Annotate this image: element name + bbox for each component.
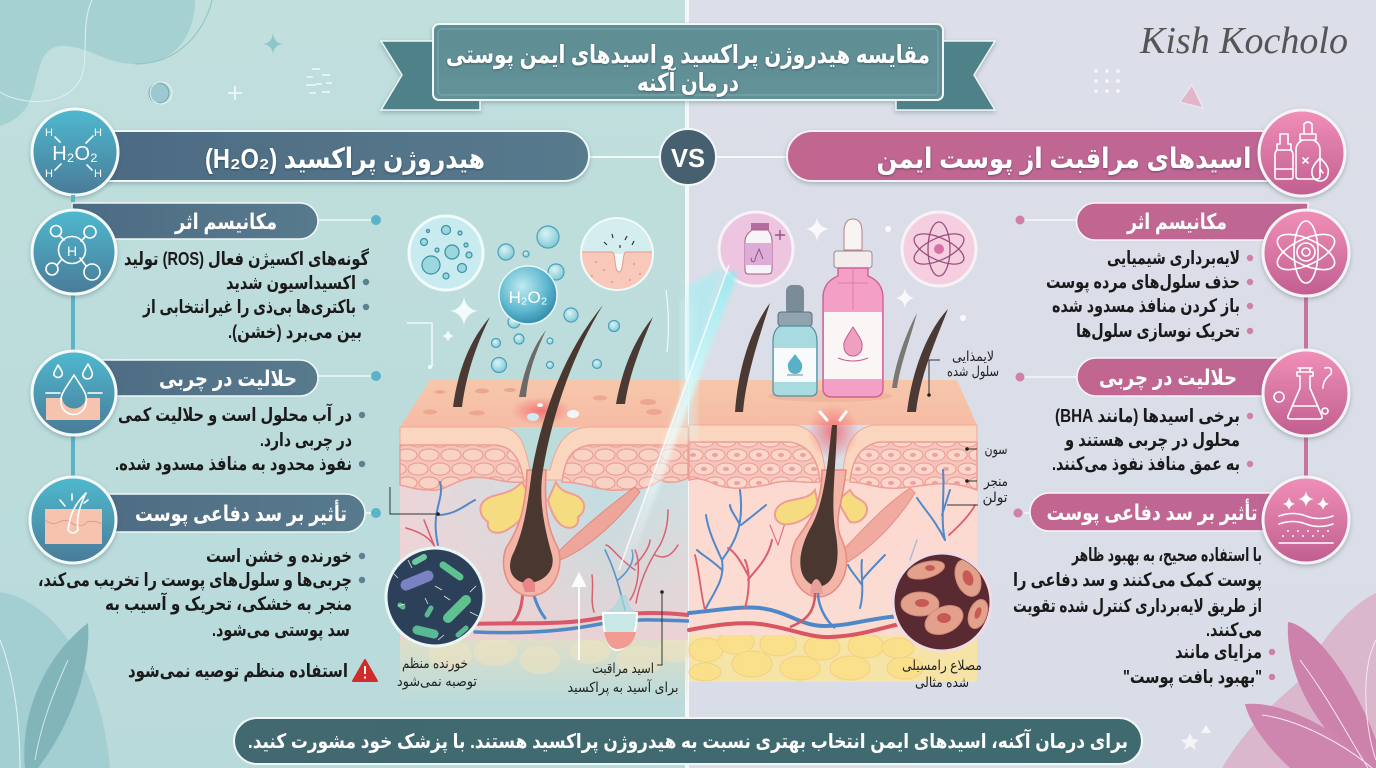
text: mechanism bullets: گونه‌های اکسیژن فعال (ROS) تولید xyxy=(124,248,369,270)
heading: barrier: تأثیر بر سد دفاعی پوست xyxy=(1046,498,1258,525)
ribbon tails xyxy=(381,41,995,110)
connector dot xyxy=(318,371,381,381)
acid cup xyxy=(603,595,637,650)
text: barrier paragraph: پوست کمک می‌کنند و سد دفاعی را xyxy=(1013,569,1262,591)
heading: solubility: حلالیت در چربی xyxy=(1099,366,1237,390)
bottle: large pink xyxy=(823,219,883,397)
icon: bottles xyxy=(1259,110,1345,196)
pore redness xyxy=(807,404,859,460)
circle: small bottle xyxy=(719,212,793,286)
labels: right illustration: سلول شده xyxy=(947,363,999,380)
panel: left solubility xyxy=(32,351,381,475)
icon: H2O2 molecule: H xyxy=(94,168,102,180)
text: mechanism bullets: بین می‌برد (خشن). xyxy=(228,321,362,343)
hair: side a xyxy=(735,303,770,412)
connector dot xyxy=(365,508,381,518)
footer conclusion xyxy=(234,718,1142,764)
follicle sheath xyxy=(503,470,560,596)
heading: barrier xyxy=(1030,493,1290,531)
header: hydrogen peroxide: هیدروژن پراکسید (H₂O₂) xyxy=(205,143,485,175)
bubble: H2O2: H₂O₂ xyxy=(509,288,547,307)
hair: side left xyxy=(453,317,490,407)
hair: root vessels xyxy=(790,593,815,627)
hair: side right xyxy=(616,317,653,404)
logo: Kish Kocholo xyxy=(1139,20,1348,62)
heading: mechanism xyxy=(72,203,318,239)
connector dot xyxy=(1016,216,1078,224)
text: barrier paragraph xyxy=(1013,544,1275,688)
labels: right illustration xyxy=(902,348,1008,690)
black leader lines xyxy=(390,487,664,665)
text: mechanism bullets: حذف سلول‌های مرده پوست xyxy=(1046,271,1240,293)
panel: right barrier xyxy=(1013,477,1349,688)
cells magnifier xyxy=(893,553,992,651)
icon: skin hair xyxy=(30,477,116,563)
text: barrier paragraph: "بهبود بافت پوست" xyxy=(1123,666,1262,688)
dermis xyxy=(689,470,977,635)
header: safe acids: اسیدهای مراقبت از پوست ایمن xyxy=(876,143,1252,175)
illustration: right skin cross-section xyxy=(689,212,1008,690)
fat layer xyxy=(689,630,977,682)
hair: papilla xyxy=(810,579,823,594)
text: barrier paragraph: با استفاده صحیح، به بهبود ظاهر xyxy=(1071,544,1262,566)
heading: barrier xyxy=(72,494,365,532)
heading: barrier: تأثیر بر سد دفاعی پوست xyxy=(135,499,347,526)
bacteria magnifier xyxy=(386,548,484,646)
left vertical connector xyxy=(71,195,75,505)
labels: left illustration: برای آسید به پراکسید xyxy=(568,679,678,696)
title ribbon: درمان آکنه xyxy=(637,67,739,97)
header: hydrogen peroxide xyxy=(100,131,589,181)
surface top xyxy=(400,380,688,427)
epidermis band xyxy=(400,427,688,480)
illustration: left skin cross-section xyxy=(386,216,693,705)
arrector muscle xyxy=(843,488,915,562)
sebaceous glands xyxy=(480,482,584,533)
labels: right illustration: شده مثالی xyxy=(915,674,969,690)
cell layer xyxy=(689,442,820,488)
text: mechanism bullets: لایه‌برداری شیمیایی xyxy=(1107,247,1240,269)
VS badge: VS xyxy=(671,143,705,173)
connector dot xyxy=(1016,372,1078,382)
text: barrier paragraph: می‌کنند. xyxy=(1206,619,1262,640)
heading: solubility xyxy=(1077,358,1300,396)
decoration: top-left blob xyxy=(0,0,332,126)
heading: solubility xyxy=(72,360,318,396)
hair: main xyxy=(510,305,603,583)
epidermis band xyxy=(689,425,977,480)
labels: right illustration: لایمذایی xyxy=(952,348,994,364)
labels: left illustration xyxy=(397,655,678,696)
text: barrier paragraph: از طریق لایه‌برداری کنترل شده تقویت xyxy=(1013,595,1262,617)
right vertical connector xyxy=(1304,280,1308,505)
sparkles and bracket xyxy=(407,290,668,369)
heading: solubility: حلالیت در چربی xyxy=(159,367,297,391)
sebaceous glands xyxy=(775,490,867,524)
panel: left mechanism xyxy=(32,203,381,343)
heading: mechanism: مکانیسم اثر xyxy=(174,210,277,234)
text: solubility bullets: در چربی دارد. xyxy=(260,429,352,451)
hair: root vein xyxy=(818,593,835,628)
text: mechanism bullets xyxy=(1046,247,1253,342)
labels: right illustration: سون xyxy=(984,441,1008,458)
follicle sheath xyxy=(791,470,847,597)
icon: molecule: H xyxy=(67,243,77,259)
icon: drop on skin xyxy=(32,351,116,435)
icon: H2O2 molecule xyxy=(32,109,118,195)
text: solubility bullets xyxy=(115,403,365,475)
vessels xyxy=(689,470,975,637)
labels: right illustration: تولن xyxy=(982,489,1008,506)
text: solubility bullets: نفوذ محدود به منافذ مسدود شده. xyxy=(115,453,352,475)
text: mechanism bullets: باز کردن منافذ مسدود شده xyxy=(1052,295,1240,317)
text: mechanism bullets xyxy=(124,248,369,343)
panel: left barrier xyxy=(30,477,381,682)
hair: side c xyxy=(907,309,948,412)
pore rays xyxy=(820,412,846,420)
heading: mechanism: مکانیسم اثر xyxy=(1126,210,1227,234)
labels: right illustration: منجر xyxy=(983,473,1008,490)
icon: skin sparkle xyxy=(1263,477,1349,563)
circle: skin pore xyxy=(580,217,654,295)
VS badge xyxy=(660,129,716,185)
surface top xyxy=(689,380,977,425)
text: solubility bullets: محلول در چربی هستند و xyxy=(1064,429,1240,451)
connector: VS line xyxy=(587,156,787,158)
decoration: top-right dots and triangle xyxy=(1094,69,1203,108)
header: safe acids xyxy=(787,131,1280,181)
hair: side grey xyxy=(519,330,546,397)
decoration: bottom-right leaves xyxy=(1181,593,1376,768)
icon: H2O2 molecule: H₂O₂ xyxy=(52,143,98,165)
text: mechanism bullets: اکسیداسیون شدید xyxy=(226,272,356,294)
light beam across divider xyxy=(619,265,738,570)
dermis xyxy=(400,470,688,640)
up arrow xyxy=(573,574,585,660)
text: barrier bullets: چربی‌ها و سلول‌های پوست را تخریب می‌کند، xyxy=(38,569,352,591)
title ribbon xyxy=(381,24,995,110)
text: barrier bullets xyxy=(38,545,365,641)
icon: H2O2 molecule: H xyxy=(45,127,53,139)
text: solubility bullets: به عمق منافذ نفوذ می‌کنند. xyxy=(1052,453,1240,475)
text: barrier bullets: منجر به خشکی، تحریک و آسیب به xyxy=(105,592,352,615)
bubbles xyxy=(492,226,620,372)
panel: right solubility xyxy=(1016,350,1349,475)
labels: right illustration: مصلاع رامسبلی xyxy=(902,657,982,674)
labels: left illustration: توصبه نمی‌شود xyxy=(397,673,477,690)
icon: molecule xyxy=(32,210,116,294)
icon: H2O2 molecule: H xyxy=(45,168,53,180)
text: solubility bullets: در آب محلول است و حلالیت کمی xyxy=(118,403,352,426)
text: barrier bullets: سد پوستی می‌شود. xyxy=(212,619,350,641)
fat layer xyxy=(400,630,693,705)
footer conclusion: برای درمان آکنه، اسیدهای ایمن انتخاب بهتری نسبت به هیدروژن پراکسید هستند. با پزشک خود مشورت کنید. xyxy=(248,728,1128,754)
text: solubility bullets xyxy=(1052,405,1253,475)
sparkles xyxy=(806,217,966,321)
bottle: small blue xyxy=(768,285,892,402)
labels: left illustration: خورنده منظم xyxy=(402,655,468,672)
text: mechanism bullets: تحریک نوسازی سلول‌ها xyxy=(1076,320,1240,342)
decoration: bottom-left leaves xyxy=(0,592,110,768)
cell layer xyxy=(400,445,524,490)
panel: right mechanism xyxy=(1016,203,1349,342)
circle: bubbles xyxy=(409,216,483,290)
icon: flask xyxy=(1263,350,1349,436)
icon: atom xyxy=(1263,210,1349,296)
hair: side grey xyxy=(892,313,917,388)
hair: follicle papilla xyxy=(522,578,535,592)
text: mechanism bullets: باکتری‌ها بی‌ذی را غیرانتخابی از xyxy=(142,296,356,318)
hair: main xyxy=(800,425,838,587)
text: barrier bullets: خورنده و خشن است xyxy=(206,545,352,567)
heading: mechanism xyxy=(1076,203,1308,240)
surface pores and redness xyxy=(423,388,662,425)
text: solubility bullets: برخی اسیدها (مانند BHA) xyxy=(1055,405,1240,427)
icon: H2O2 molecule: H xyxy=(94,127,102,139)
bubble: H2O2 xyxy=(499,266,557,324)
labels: left illustration: اسید مراقبت xyxy=(592,660,654,677)
text: barrier paragraph: مزایای مانند xyxy=(1175,641,1262,663)
title ribbon: مقایسه هیدروژن پراکسید و اسیدهای ایمن پوستی xyxy=(446,41,930,70)
arrector muscle xyxy=(557,487,640,560)
connector dot xyxy=(1014,508,1030,518)
connector dot xyxy=(318,215,381,225)
circle: atom xyxy=(902,212,976,286)
vessels xyxy=(406,482,688,633)
warning note: استفاده منظم توصیه نمی‌شود xyxy=(128,660,348,682)
